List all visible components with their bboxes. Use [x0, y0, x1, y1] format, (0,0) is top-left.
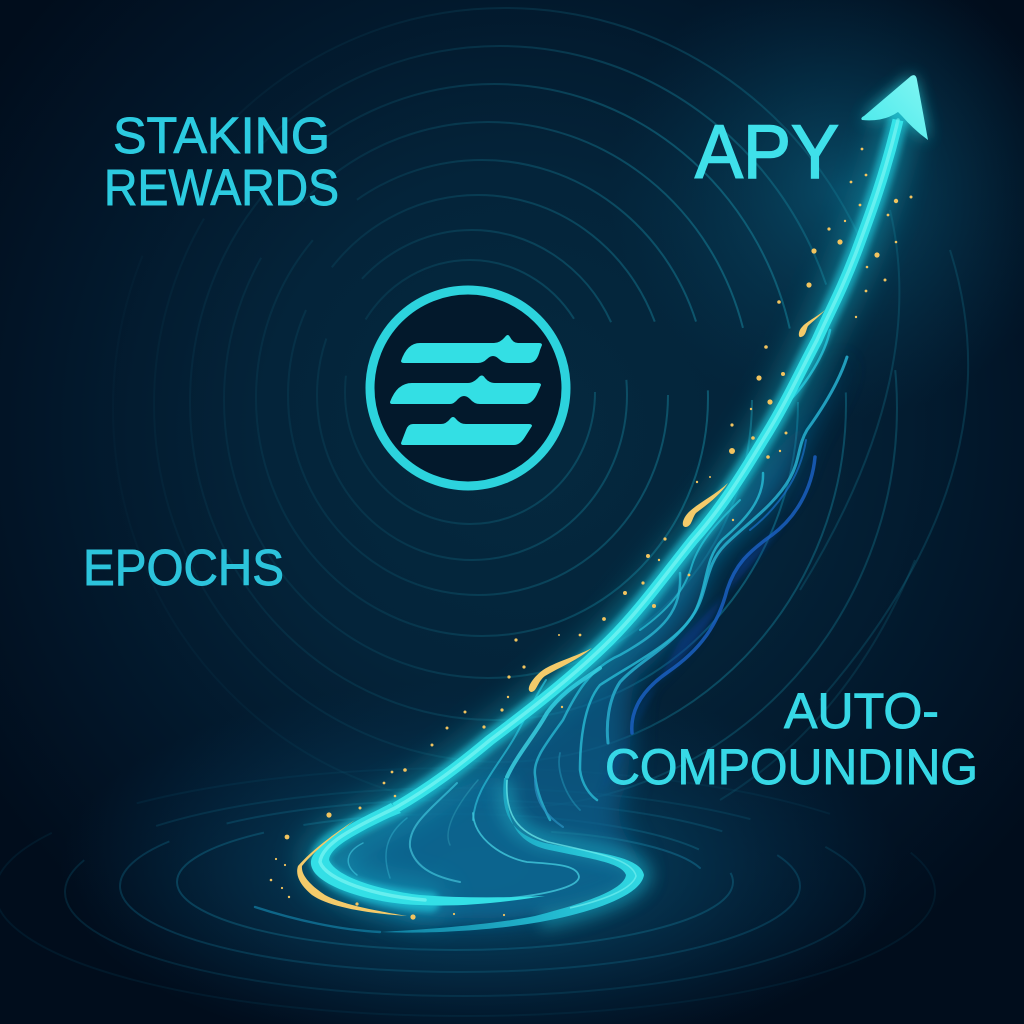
logo ring: [370, 290, 566, 486]
flow strands: [348, 330, 847, 903]
arrowhead: [861, 75, 928, 140]
concentric ripple rings: [113, 8, 968, 808]
gold swooshes: [297, 310, 825, 916]
gold sparkle particles: [270, 148, 912, 920]
logo emblem: [370, 290, 566, 486]
bottom swirl ripples: [0, 768, 935, 1016]
label: epochs: EPOCHS: [83, 539, 284, 596]
label: APY: APY: [695, 110, 839, 195]
label: staking rewards: [104, 107, 339, 216]
lower ribbon of the swirl: [255, 778, 644, 933]
label: staking rewards: REWARDS: [104, 159, 339, 216]
blue flow beneath the curve: [325, 357, 847, 926]
label: staking rewards: STAKING: [113, 107, 330, 164]
label: auto-compounding: COMPOUNDING: [605, 739, 978, 795]
label: auto-compounding: [605, 683, 978, 795]
label: auto-compounding: AUTO-: [784, 683, 939, 739]
logo bars: [390, 335, 542, 445]
glowing growth curve: [311, 120, 898, 906]
swirl crescent of the curve: [311, 803, 545, 906]
